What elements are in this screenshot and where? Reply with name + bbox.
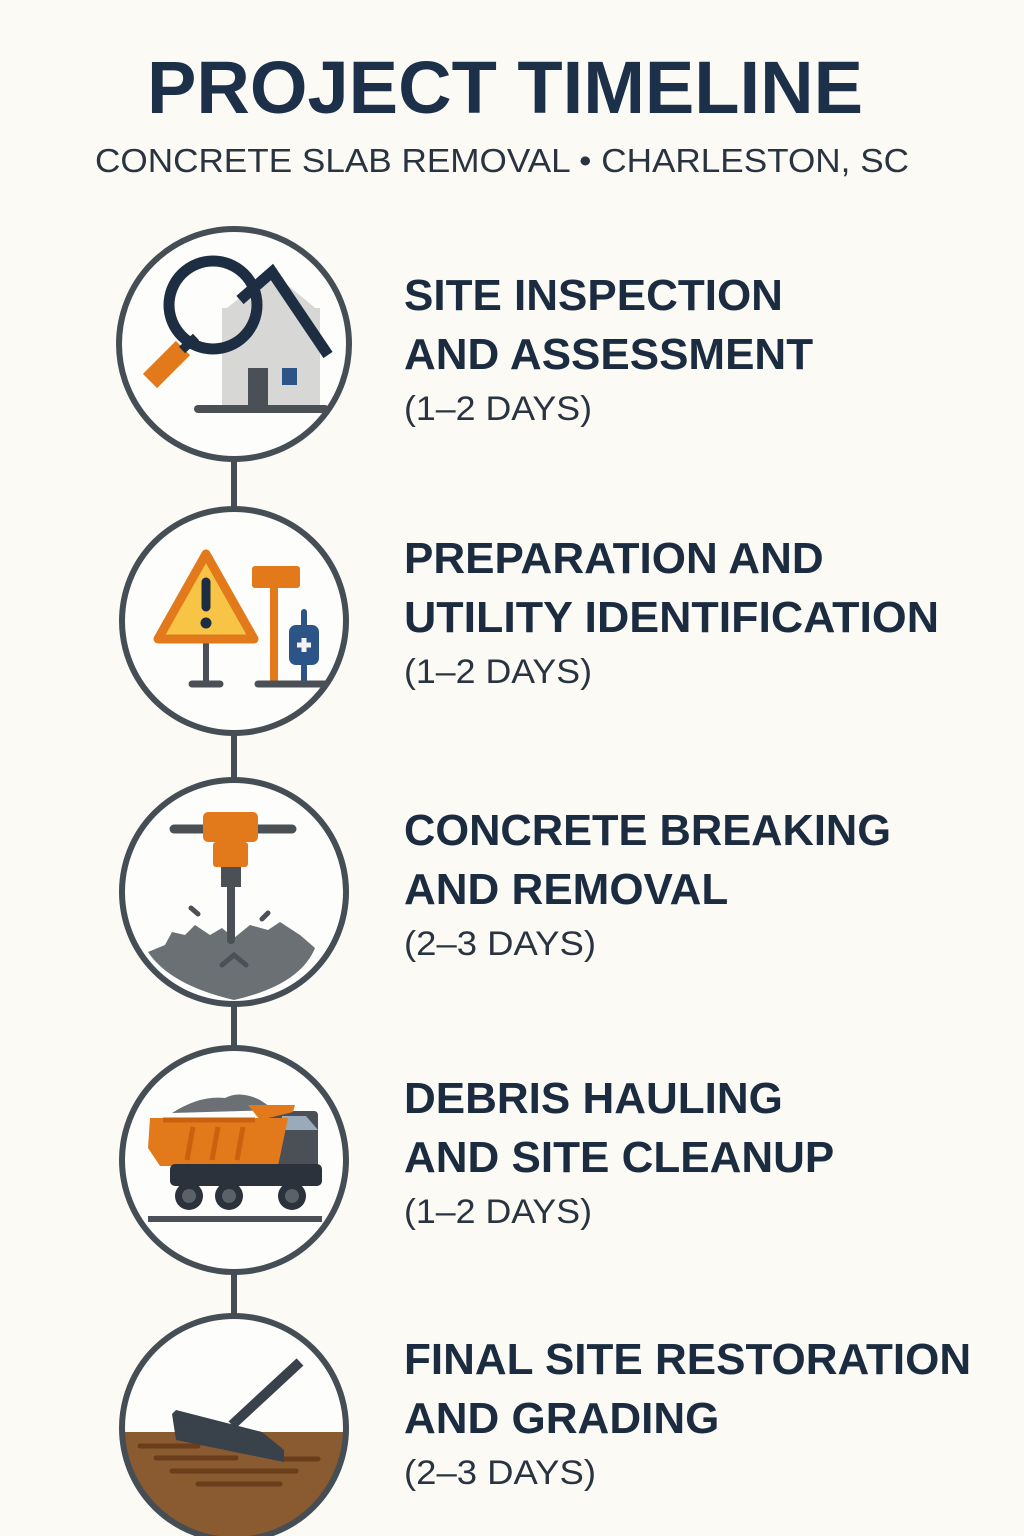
step 2 icon: preparation xyxy=(122,509,346,733)
step 2 text: (1–2 DAYS) xyxy=(404,653,592,691)
step 2 text: UTILITY IDENTIFICATION xyxy=(404,593,939,642)
connector line xyxy=(231,460,237,1318)
title: PROJECT TIMELINE xyxy=(147,46,863,129)
step 3 text: (2–3 DAYS) xyxy=(404,925,596,963)
step 1 text xyxy=(404,271,813,428)
step 2 text xyxy=(404,534,939,691)
step 4 text: DEBRIS HAULING xyxy=(404,1074,783,1123)
step 1 text: (1–2 DAYS) xyxy=(404,390,592,428)
step 5 text: AND GRADING xyxy=(404,1394,719,1443)
step 1 icon: inspection xyxy=(119,229,349,459)
step 4 text: (1–2 DAYS) xyxy=(404,1193,592,1231)
step 4 text xyxy=(404,1074,834,1231)
step 1 text: AND ASSESSMENT xyxy=(404,330,813,379)
step 4 icon: truck xyxy=(122,1048,346,1272)
step 5 text: FINAL SITE RESTORATION xyxy=(404,1335,971,1384)
subtitle: CONCRETE SLAB REMOVAL • CHARLESTON, SC xyxy=(95,142,909,179)
step 3 icon: breaking xyxy=(122,780,346,1004)
step 3 text: AND REMOVAL xyxy=(404,865,728,914)
step 5 text xyxy=(404,1335,971,1492)
step 5 text: (2–3 DAYS) xyxy=(404,1454,596,1492)
step 1 text: SITE INSPECTION xyxy=(404,271,783,320)
step 5 icon: grading xyxy=(120,1316,350,1536)
step 3 text: CONCRETE BREAKING xyxy=(404,806,891,855)
step 3 text xyxy=(404,806,891,963)
step 2 text: PREPARATION AND xyxy=(404,534,824,583)
step 4 text: AND SITE CLEANUP xyxy=(404,1133,834,1182)
